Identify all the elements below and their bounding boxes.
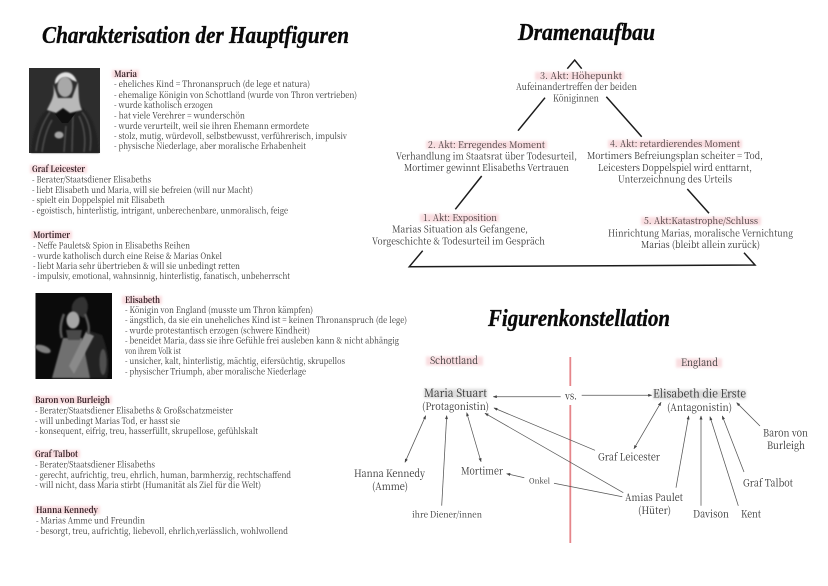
- text block: 2. Akt: [396, 137, 577, 174]
- node: Mortimer: Mortimer: [461, 462, 503, 478]
- label: vs.: vs.: [564, 388, 577, 402]
- text block: 4. Akt: Unterzeichnung des Urteils: [618, 172, 732, 186]
- node: Maria Stuart: [422, 385, 489, 413]
- text block: Graf Leicester: - egoistisch, hinterlistig, intrigant, unberechenbare, unmoralisch, feige: [32, 204, 288, 216]
- portrait: Elisabeth: [34, 293, 112, 379]
- text block: 2. Akt: Verhandlung im Staatsrat über Todesurteil,: [396, 148, 577, 162]
- text block: 3. Akt: Aufeinandertreffen der beiden: [516, 79, 638, 93]
- text block: Graf Leicester: Graf Leicester: [32, 162, 86, 175]
- node: Maria Stuart: Maria Stuart: [424, 385, 488, 401]
- node: Amias Paulet: [625, 489, 683, 517]
- text block: Baron von Burleigh: - Berater/Staatsdiener Elisabeths & Großschatzmeister: [35, 404, 233, 416]
- text block: Graf Leicester: - Berater/Staatsdiener Elisabeths: [32, 172, 151, 186]
- text block: Mortimer: - impulsiv, emotional, wahnsinnig, hinterlistig, fanatisch, unbeherrscht: [33, 269, 291, 282]
- text block: Maria: [112, 67, 357, 152]
- text block: Elisabeth: Elisabeth: [125, 293, 160, 306]
- text block: Mortimer: - liebt Maria sehr übertrieben & will sie unbedingt retten: [33, 259, 240, 272]
- text block: Elisabeth: von ihrem Volk ist: [124, 344, 182, 357]
- text block: Graf Talbot: - gerecht, aufrichtig, treu, ehrlich, human, barmherzig, rechtschaffend: [35, 468, 291, 481]
- text block: 4. Akt: [587, 136, 763, 186]
- text block: Mortimer: - Neffe Paulets& Spion in Elisabeths Reihen: [33, 238, 190, 252]
- text block: Elisabeth: - wurde protestantisch erzogen (schwere Kindheit): [125, 324, 310, 336]
- node: Baron von Burleigh: Baron von: [763, 424, 808, 440]
- text block: Maria: - ehemalige Königin von Schottland (wurde von Thron vertrieben): [114, 88, 357, 101]
- text block: Graf Leicester: - liebt Elisabeth und Maria, will sie befreien (will nur Macht): [32, 183, 253, 196]
- text block: 4. Akt: 4. Akt: retardierendes Moment: [610, 136, 741, 150]
- text block: 1. Akt: Marias Situation als Gefangene,: [392, 222, 528, 236]
- text block: Elisabeth: - physischer Triumph, aber moralische Niederlage: [125, 364, 306, 378]
- text block: 1. Akt: Vorgeschichte & Todesurteil im Gespräch: [372, 234, 546, 248]
- text block: Elisabeth: - beneidet Maria, dass sie ihre Gefühle frei ausleben kann & nicht abhängig: [125, 334, 399, 346]
- text block: 4. Akt: Mortimers Befreiungsplan scheiter = Tod,: [587, 148, 763, 162]
- text block: Hanna Kennedy: [34, 503, 288, 537]
- text block: 5. Akt: Hinrichtung Marias, moralische Vernichtung: [608, 226, 793, 240]
- heading: England: England: [681, 354, 718, 369]
- text block: Maria: - hat viele Verehrer = wunderschön: [114, 108, 245, 122]
- node: ihre Diener/innen: ihre Diener/innen: [412, 508, 482, 520]
- text block: Elisabeth: - ängstlich, da sie ein uneheliches Kind ist = keinen Thronanspruch (de lege): [125, 313, 407, 326]
- node: Hanna Kennedy: [354, 465, 425, 493]
- text block: 2. Akt: 2. Akt: Erregendes Moment: [428, 137, 546, 151]
- title: Figurenkonstellation: Figurenkonstellation: [487, 306, 670, 332]
- text block: Maria: - wurde verurteilt, weil sie ihren Ehemann ermordete: [114, 119, 309, 132]
- node: Elisabeth die Erste: (Antagonistin): [667, 399, 732, 414]
- node: Davison: Davison: [693, 506, 729, 520]
- text block: Maria: - eheliches Kind = Thronanspruch (de lege et natura): [114, 77, 310, 90]
- node: Amias Paulet: Amias Paulet: [625, 489, 683, 504]
- node: Graf Talbot: Graf Talbot: [743, 474, 793, 490]
- text block: Mortimer: [31, 228, 291, 282]
- text block: Hanna Kennedy: - besorgt, treu, aufrichtig, liebevoll, ehrlich,verlässlich, wohlwollend: [36, 524, 288, 537]
- text block: Elisabeth: - unsicher, kalt, hinterlistig, mächtig, eifersüchtig, skrupellos: [125, 354, 345, 367]
- text block: Graf Talbot: [33, 447, 291, 491]
- text block: Mortimer: - wurde katholisch durch eine Reise & Marias Onkel: [33, 249, 222, 262]
- node: Hanna Kennedy: (Amme): [372, 478, 408, 493]
- text block: Elisabeth: - Königin von England (musste um Thron kämpfen): [125, 303, 313, 316]
- text block: Maria: - physische Niederlage, aber moralische Erhabenheit: [114, 139, 307, 152]
- text block: 3. Akt: 3. Akt: Höhepunkt: [540, 68, 623, 82]
- text block: Graf Talbot: - will nicht, dass Maria stirbt (Humanität als Ziel für die Welt): [35, 478, 261, 491]
- text block: Hanna Kennedy: - Marias Amme und Freundin: [36, 514, 145, 526]
- divider: red vertical line between Schottland and England: [569, 357, 571, 543]
- text block: Baron von Burleigh: Baron von Burleigh: [35, 393, 110, 406]
- text block: Graf Leicester: [30, 162, 288, 216]
- chart: Dramenaufbau pyramid lines: [409, 60, 755, 267]
- text block: 3. Akt: [516, 68, 638, 104]
- text block: 4. Akt: Leicesters Doppelspiel wird enttarnt,: [598, 160, 752, 174]
- node: Amias Paulet: (Hüter): [638, 502, 671, 517]
- text block: 5. Akt: 5. Akt:Katastrophe/Schluss: [644, 213, 758, 227]
- text block: Maria: - wurde katholisch erzogen: [114, 98, 213, 111]
- node: Elisabeth die Erste: [653, 386, 746, 414]
- text block: Maria: - stolz, mutig, würdevoll, selbstbewusst, verführerisch, impulsiv: [114, 129, 347, 142]
- text block: Baron von Burleigh: - will unbedingt Marias Tod, er hasst sie: [35, 414, 180, 427]
- text block: Maria: Maria: [114, 67, 138, 80]
- node: Kent: Kent: [741, 506, 761, 520]
- text block: 3. Akt: Königinnen: [553, 90, 600, 104]
- text block: 5. Akt: [608, 213, 793, 251]
- text block: Baron von Burleigh: [33, 393, 259, 437]
- text block: Mortimer: Mortimer: [33, 228, 71, 241]
- title: Charakterisation der Hauptfiguren: Charakterisation der Hauptfiguren: [42, 23, 349, 49]
- node: Hanna Kennedy: Hanna Kennedy: [354, 465, 425, 480]
- text block: Hanna Kennedy: Hanna Kennedy: [36, 503, 99, 516]
- text block: Baron von Burleigh: - konsequent, eifrig, treu, hasserfüllt, skrupellose, gefühlskalt: [35, 424, 259, 437]
- portrait: Maria: [29, 68, 100, 153]
- title: Dramenaufbau: Dramenaufbau: [517, 20, 655, 46]
- node: Baron von Burleigh: Burleigh: [767, 437, 805, 452]
- node: Baron von Burleigh: [763, 424, 808, 452]
- text block: Graf Talbot: Graf Talbot: [35, 447, 78, 460]
- text block: Graf Leicester: - spielt ein Doppelspiel mit Elisabeth: [32, 193, 165, 206]
- text block: 2. Akt: Mortimer gewinnt Elisabeths Vertrauen: [404, 160, 570, 174]
- text block: Graf Talbot: - Berater/Staatsdiener Elisabeths: [35, 458, 155, 470]
- node: Maria Stuart: (Protagonistin): [422, 398, 489, 413]
- label: Onkel: Onkel: [529, 476, 550, 486]
- text block: 1. Akt: [372, 210, 546, 248]
- arrows: Figurenkonstellation connections: [405, 395, 760, 506]
- heading: Schottland: Schottland: [430, 352, 478, 367]
- node: Elisabeth die Erste: Elisabeth die Erste: [653, 386, 746, 402]
- text block: Elisabeth: [122, 293, 407, 378]
- text block: 5. Akt: Marias (bleibt allein zurück): [641, 237, 760, 251]
- text block: 1. Akt: 1. Akt: Exposition: [423, 210, 497, 224]
- node: Graf Leicester: Graf Leicester: [598, 448, 660, 464]
